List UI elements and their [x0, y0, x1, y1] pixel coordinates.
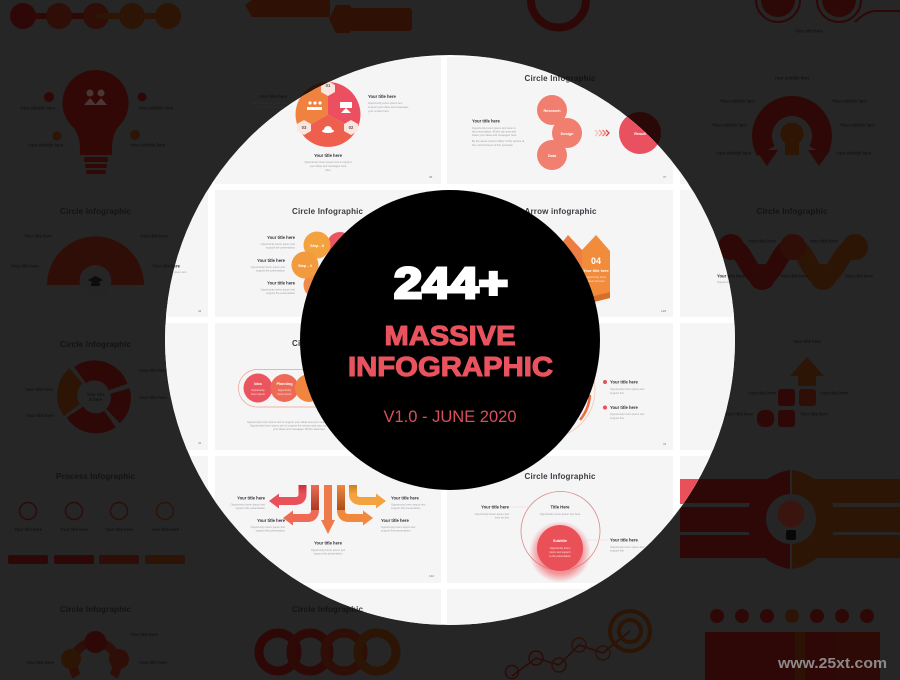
side labels: Opportunity lorem ipsum text	[610, 545, 645, 549]
title: circle infographic: Circle Infographic	[60, 605, 132, 614]
arrow labels: support the presentation	[314, 552, 343, 556]
circle labels: Research	[543, 109, 561, 113]
arrow labels: Your title here	[381, 518, 410, 523]
donut labels: Your title here	[25, 387, 54, 392]
dimmed donut	[67, 370, 121, 423]
title: circle infographic: Circle Infographic	[524, 74, 596, 83]
dimmed flower	[26, 631, 168, 676]
dimmed wave	[718, 234, 868, 290]
text block: the current theme of this operation	[472, 143, 513, 147]
title: circle infographic: Circle Infographic	[292, 207, 364, 216]
pie text right: your content here	[368, 109, 389, 113]
hexagon labels	[245, 0, 412, 33]
left inner arrow	[283, 485, 319, 526]
bright parts of edge slides	[139, 264, 746, 614]
dimmed arrow blocks: Your title here	[725, 412, 754, 416]
top circles	[756, 0, 900, 34]
semicircle labels	[11, 234, 181, 268]
pie text bottom: here	[325, 168, 331, 172]
dimmed arrow blocks: Your title here	[800, 412, 829, 416]
horseshoe labels: Your subtitle here	[774, 76, 810, 80]
result circle	[619, 116, 658, 154]
step labels: support the presentation	[256, 268, 285, 272]
body text: Opportunity lorem ipsum text to support your ideas and your messages, to the service of the	[247, 420, 357, 424]
side labels: Opportunity lorem ipsum text	[475, 512, 509, 516]
process circles: Idea	[254, 382, 263, 386]
page numbers: 128	[661, 309, 666, 313]
arrow text: ipsum text here	[587, 279, 605, 283]
semicircle labels: Your title here	[24, 234, 53, 238]
headline: 244+: 244+	[394, 259, 508, 308]
step labels: support the presentation	[266, 291, 295, 295]
process circles: Opportunity	[251, 388, 265, 392]
semicircle labels: Your title here	[140, 234, 169, 238]
process circles	[244, 374, 314, 402]
title: circle infographic: Circle Infographic	[524, 472, 596, 481]
circles	[537, 95, 582, 170]
bullet labels	[610, 380, 645, 420]
bulb labels	[20, 106, 174, 148]
arrow text: 04	[591, 256, 601, 266]
page numbers: 41	[198, 441, 202, 445]
side labels: here for this	[495, 516, 510, 520]
circle text: Opportunity lorem	[550, 546, 570, 550]
bullet labels: Opportunity lorem ipsum text	[610, 387, 645, 391]
dimmed slides: right column	[680, 0, 900, 680]
donut labels: Your title	[87, 392, 105, 397]
circle text: ipsum text support	[549, 550, 571, 554]
wave labels: Your title here	[748, 238, 777, 244]
circle labels	[543, 109, 647, 158]
horseshoe labels: Your subtitle here	[720, 98, 756, 104]
dimmed ring chain	[259, 633, 396, 671]
badge numbers: 03	[302, 125, 307, 130]
body text: your ideas and messages, fill this area here	[273, 427, 325, 431]
dimmed pie slide: Your title here	[259, 94, 288, 99]
title: circle infographic: Circle Infographic	[60, 207, 132, 216]
pie text bottom: your ideas and messages here	[310, 164, 347, 168]
edge labels: Your title here	[717, 274, 746, 278]
panel: ring with bullets	[566, 380, 644, 434]
step circles: Step - 4	[298, 264, 313, 268]
arrow labels: Opportunity lorem ipsum text	[251, 525, 285, 529]
title here: Opportunity lorem ipsum text here	[540, 512, 581, 516]
arrow text: Your title here	[583, 269, 609, 273]
title: arrow infographic: Arrow infographic	[524, 207, 597, 216]
semicircle labels: Your title here	[11, 264, 40, 268]
arrow labels: support this presentation	[391, 506, 421, 510]
circle labels: Data	[548, 154, 557, 158]
page numbers: 31	[663, 442, 667, 446]
process circles: Planning	[276, 382, 293, 386]
bulb labels: Your subtitle here	[20, 106, 56, 110]
wave labels: Your title here	[810, 238, 839, 244]
edge labels	[139, 264, 746, 373]
page numbers: 37	[663, 175, 667, 179]
title here: Title Here	[550, 504, 570, 510]
step labels	[251, 235, 296, 295]
arrow labels: Opportunity lorem ipsum text	[231, 502, 265, 506]
pie icons	[307, 101, 352, 133]
body text	[247, 421, 328, 430]
bulb labels: Your subtitle here	[130, 142, 166, 148]
thick arc	[580, 395, 590, 420]
side labels: Your title here	[610, 538, 639, 542]
dimmed pie slide	[252, 82, 360, 131]
step labels: Opportunity lorem ipsum text	[261, 288, 295, 292]
dimmed slides: left column	[8, 3, 185, 676]
right outer arrow	[349, 485, 386, 508]
step labels: Your title here	[257, 258, 286, 263]
thin ring	[566, 380, 596, 434]
bullet labels: Opportunity lorem ipsum text	[610, 412, 645, 416]
process circles: Opportunity	[278, 388, 292, 392]
bullet labels: support this	[610, 416, 625, 420]
text block: share your ideas and messages here.	[472, 133, 517, 137]
pie text right	[368, 94, 409, 113]
step labels: Your title here	[267, 235, 296, 240]
horseshoe labels: Your subtitle here	[716, 150, 752, 156]
horseshoe labels	[712, 76, 876, 156]
wave labels: Your title here	[780, 274, 809, 278]
bullet labels: Your title here	[610, 405, 639, 410]
arrow labels: Your title here	[237, 496, 266, 500]
top circles: Your title here	[795, 28, 824, 34]
step labels: Your title here	[267, 280, 296, 286]
panel: circle with subtitle	[475, 472, 645, 583]
step circles: Step - 3	[310, 244, 324, 248]
dimmed pie slide: Opportunity lorem ipsum text	[252, 101, 286, 105]
page numbers: 132	[429, 574, 434, 578]
text block: Opportunity lorem ipsum text here to	[472, 126, 516, 130]
central black circle	[300, 190, 600, 490]
edge labels: Your title here	[152, 264, 181, 268]
step labels: support the presentation	[266, 246, 295, 250]
side labels	[475, 504, 645, 552]
title: circle infographic: Circle Infographic	[524, 74, 596, 83]
red circle	[537, 525, 583, 571]
horseshoe labels: Your subtitle here	[712, 122, 748, 128]
page numbers	[198, 175, 667, 578]
edge labels: Opportunity lorem ipsum text	[152, 270, 187, 274]
dimmed flower: Your title here	[139, 660, 168, 665]
horseshoe labels: Your subtitle here	[840, 122, 876, 128]
arrow text	[583, 256, 609, 283]
version line: V1.0 - JUNE 2020	[384, 407, 516, 426]
text block	[472, 118, 524, 147]
circle labels: Result	[634, 132, 647, 136]
headline: massive infographic: INFOGRAPHIC	[348, 351, 553, 382]
title: circle infographic: Circle Infographic	[756, 207, 828, 216]
panel: pie slide	[296, 81, 409, 172]
headline: massive infographic: MASSIVE	[384, 320, 516, 351]
horseshoe labels: Your subtitle here	[836, 150, 872, 156]
arrow labels: Opportunity lorem ipsum text	[381, 525, 416, 529]
glow	[529, 521, 591, 583]
step labels: Opportunity lorem ipsum text	[261, 242, 295, 246]
edge labels: Opportunity lorem	[717, 280, 739, 284]
arrow labels: support this presentation	[236, 506, 265, 510]
title: process infographic: Process Infographic	[56, 472, 136, 481]
right inner arrow	[337, 485, 373, 526]
donut labels: Your title here	[139, 368, 168, 373]
title: circle infographic: Circle Infographic	[292, 339, 364, 348]
step labels: Opportunity lorem ipsum text	[251, 265, 285, 269]
pie text right: Opportunity lorem ipsum text	[368, 101, 403, 105]
dimmed process cards: Your title here	[14, 527, 43, 532]
body text: Opportunity lorem ipsum text to support the service and your content messages here	[250, 424, 351, 428]
page numbers: 44	[198, 309, 202, 313]
pie badges	[297, 81, 358, 135]
bottom title: Circle Infographic	[292, 605, 364, 614]
wave labels	[717, 238, 874, 278]
text block: By the same content officer of the service at	[472, 139, 524, 143]
edge labels: Your title here	[139, 368, 168, 373]
title here	[540, 504, 581, 516]
circle labels: Design	[561, 132, 574, 136]
dimmed light bulb	[44, 70, 146, 174]
page numbers: 36	[429, 175, 433, 179]
red bar	[680, 479, 710, 504]
circle text: Subtitle	[553, 539, 567, 543]
arrow labels	[231, 496, 426, 556]
badge numbers: 02	[349, 125, 354, 130]
dimmed light bulb wheel	[680, 470, 900, 569]
white circle with bright slides	[139, 55, 746, 625]
panel: pill circles	[238, 340, 328, 430]
step circles	[292, 232, 345, 294]
dimmed numbered table	[705, 609, 880, 680]
dimmed result circle	[619, 112, 661, 154]
dimmed arrow blocks: Your title here	[793, 339, 822, 344]
pie text bottom: Opportunity lorem ipsum text to support	[304, 160, 352, 164]
wave labels: Your title here	[717, 274, 746, 278]
dimmed target timeline	[506, 611, 650, 678]
donut labels: Your title here	[26, 413, 55, 418]
pie chart	[296, 82, 360, 147]
pill outline	[238, 369, 316, 408]
donut labels: Your title here	[139, 395, 168, 400]
arrow labels: support this presentation	[256, 528, 285, 532]
semicircle labels: Your title here	[152, 264, 181, 268]
badge numbers: 01	[326, 83, 331, 88]
chevron arrows	[595, 130, 609, 136]
text block: the presentation, fill this dip area and	[472, 130, 516, 134]
badge numbers	[302, 83, 354, 130]
bullets	[603, 380, 607, 410]
panel: research design data	[472, 74, 661, 170]
dimmed arrow blocks: Your title here	[748, 390, 777, 396]
arrow text: Opportunity lorem	[586, 275, 606, 279]
process circles: lorem ipsum	[277, 392, 292, 396]
bullet labels: support this	[610, 391, 625, 395]
dimmed slides: middle columns	[245, 0, 661, 678]
horseshoe labels: Your subtitle here	[832, 98, 868, 104]
chain of circles	[10, 3, 181, 29]
dimmed flower: Your title here	[26, 660, 55, 665]
dimmed arrow slide text: Circle Infographic	[292, 605, 364, 614]
circle text: to the presentation	[549, 554, 571, 558]
panel: arrow infographic	[524, 207, 610, 305]
side labels: support this	[610, 548, 625, 552]
arrow labels: support this presentation	[381, 528, 411, 532]
pie text bottom	[304, 153, 352, 172]
text block: Your title here	[472, 118, 501, 124]
arrow shapes	[563, 235, 610, 302]
bulb labels: Your subtitle here	[28, 142, 64, 148]
pie text bottom: Your title here	[314, 153, 343, 158]
dimmed pie slide: support your ideas here	[258, 105, 286, 109]
dimmed semicircle	[47, 236, 144, 297]
dimmed arrow blocks: Your title here	[820, 390, 849, 396]
panel: arrows spread	[231, 485, 426, 556]
bullet labels: Your title here	[610, 380, 639, 384]
connectors	[510, 507, 608, 540]
left outer arrow	[269, 485, 306, 508]
dimmed process cards: Your title here	[151, 527, 180, 532]
circle text	[549, 539, 571, 558]
watermark: www.25xt.com	[777, 655, 887, 672]
wave labels: Your title here	[845, 274, 874, 278]
title: circle infographic: Circle Infographic	[60, 340, 132, 349]
dimmed process cards: Your title here	[60, 527, 89, 532]
dimmed flower: Your title here	[130, 632, 159, 637]
dimmed process cards: Your title here	[105, 527, 134, 532]
pie text right: Your title here	[368, 94, 397, 99]
process circles: lorem ipsum	[251, 392, 265, 396]
donut labels	[25, 368, 168, 418]
dimmed ring	[531, 0, 586, 28]
arrow labels: Opportunity lorem ipsum text	[311, 548, 345, 552]
pie text right: support your ideas and messages	[368, 105, 409, 109]
headline: massive infographic	[348, 320, 553, 382]
dimmed horseshoe	[756, 106, 830, 166]
arrow labels: Your title here	[391, 496, 420, 500]
slide backgrounds	[165, 57, 735, 625]
outer ring	[521, 492, 600, 570]
dimmed arrow blocks	[725, 339, 849, 427]
donut labels: & here	[89, 397, 103, 402]
arrow labels: Opportunity lorem ipsum text	[391, 502, 426, 506]
center arrow	[321, 485, 335, 534]
bulb labels: Your subtitle here	[138, 106, 174, 110]
arrow labels: Your title here	[314, 540, 343, 546]
panel: step circles	[251, 207, 364, 298]
dimmed process cards	[8, 502, 185, 564]
side labels: Your title here	[481, 504, 510, 510]
arrow labels: Your title here	[257, 518, 286, 523]
